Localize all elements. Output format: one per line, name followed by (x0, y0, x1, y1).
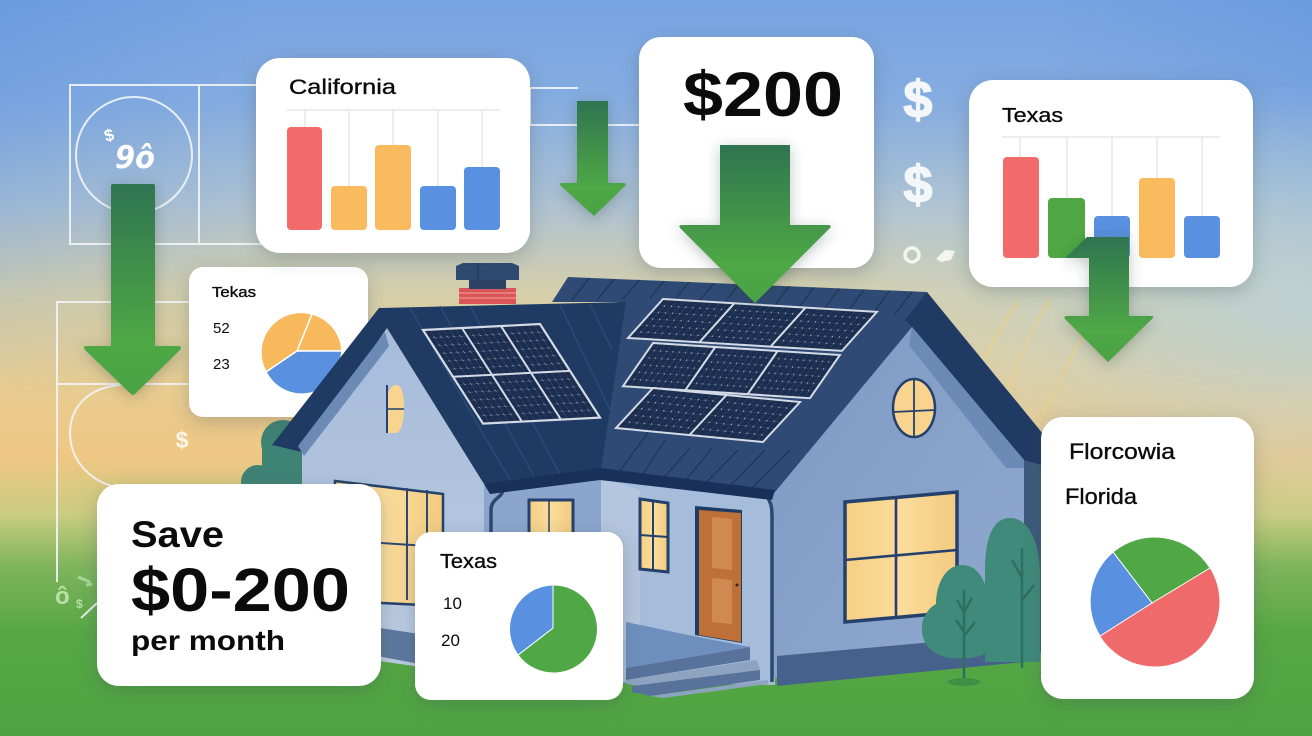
icon: faded money doodle bottom left (55, 577, 92, 611)
icon: dollar signs right: $ (904, 156, 933, 214)
Tekas heading: Tekas (212, 284, 256, 301)
middle wall (484, 470, 775, 685)
arrow: large centre (679, 145, 831, 303)
Tekas values: 23 (213, 356, 230, 373)
Texas pie values (441, 594, 462, 650)
icon: dollar signs right (904, 71, 955, 262)
right gable wall (772, 322, 1024, 678)
decorative blueprint lines (57, 85, 640, 618)
Save label: Save (131, 514, 224, 555)
right window (845, 492, 957, 622)
left wall base (302, 616, 484, 676)
door (695, 506, 742, 643)
arrow: left (84, 184, 181, 395)
right solar panel row 2 (623, 343, 840, 398)
dollar figure in circle: $ (102, 125, 117, 146)
porch and steps (626, 622, 768, 698)
chimney (456, 263, 519, 304)
icon: dollar signs right: $ (904, 71, 933, 129)
Tekas values: 52 (213, 320, 230, 337)
panel: Save callout (97, 484, 381, 686)
arched gable window (387, 385, 404, 433)
panel: $200 card (639, 37, 874, 268)
right wall base (777, 634, 1024, 686)
right gable fascia (905, 292, 1052, 468)
panel: Tekas pie card (189, 267, 368, 417)
Texas pie values: 10 (443, 594, 462, 613)
$200 amount: $200 (683, 60, 843, 130)
Texas heading: Texas (1002, 105, 1063, 127)
Texas pie chart (509, 585, 597, 673)
panel: Texas pie card (415, 532, 623, 700)
per month label: per month (131, 625, 285, 656)
left slope roof (272, 302, 775, 500)
right slope roof (552, 277, 927, 492)
left solar panel array (423, 324, 600, 424)
dollar figure in circle: 9ô (115, 140, 155, 176)
California bars (287, 127, 500, 230)
tree behind left gable (241, 420, 306, 499)
right solar panel row 3 (616, 388, 800, 442)
Texas pie heading: Texas (440, 551, 497, 573)
icon: faded money doodle bottom left: ô (55, 583, 70, 610)
far side strip (1024, 460, 1045, 660)
dollar figure in circle (102, 125, 155, 176)
icon: faded money doodle bottom left: $ (76, 597, 83, 611)
narrow window (640, 499, 668, 572)
Texas bars (1003, 157, 1220, 258)
Tekas values (213, 320, 230, 373)
Savings amount: $0-200 (131, 556, 350, 624)
Florcowia label: Florcowia (1069, 439, 1176, 464)
Florida pie chart (1090, 537, 1220, 667)
Texas pie values: 20 (441, 631, 460, 650)
small middle window (529, 500, 573, 540)
left gable wall (302, 328, 484, 676)
panel: Texas bar chart (969, 80, 1253, 287)
right trees (922, 518, 1040, 686)
round gable window (893, 379, 935, 437)
downspouts (491, 489, 772, 682)
right solar panel row 1 (628, 299, 877, 351)
panel: California bar chart (256, 58, 530, 253)
arrow: small top (560, 101, 626, 216)
Texas gridlines (1002, 137, 1220, 216)
California gridlines (287, 110, 500, 186)
large left window (335, 481, 443, 606)
Tekas pie chart (261, 312, 342, 394)
house illustration (272, 263, 1052, 698)
panel: Florida pie card (1041, 417, 1254, 699)
arrow: right (1064, 237, 1153, 362)
icon: small dollar sign left: $ (176, 427, 189, 453)
Florida label: Florida (1065, 484, 1138, 509)
California heading: California (289, 76, 396, 99)
